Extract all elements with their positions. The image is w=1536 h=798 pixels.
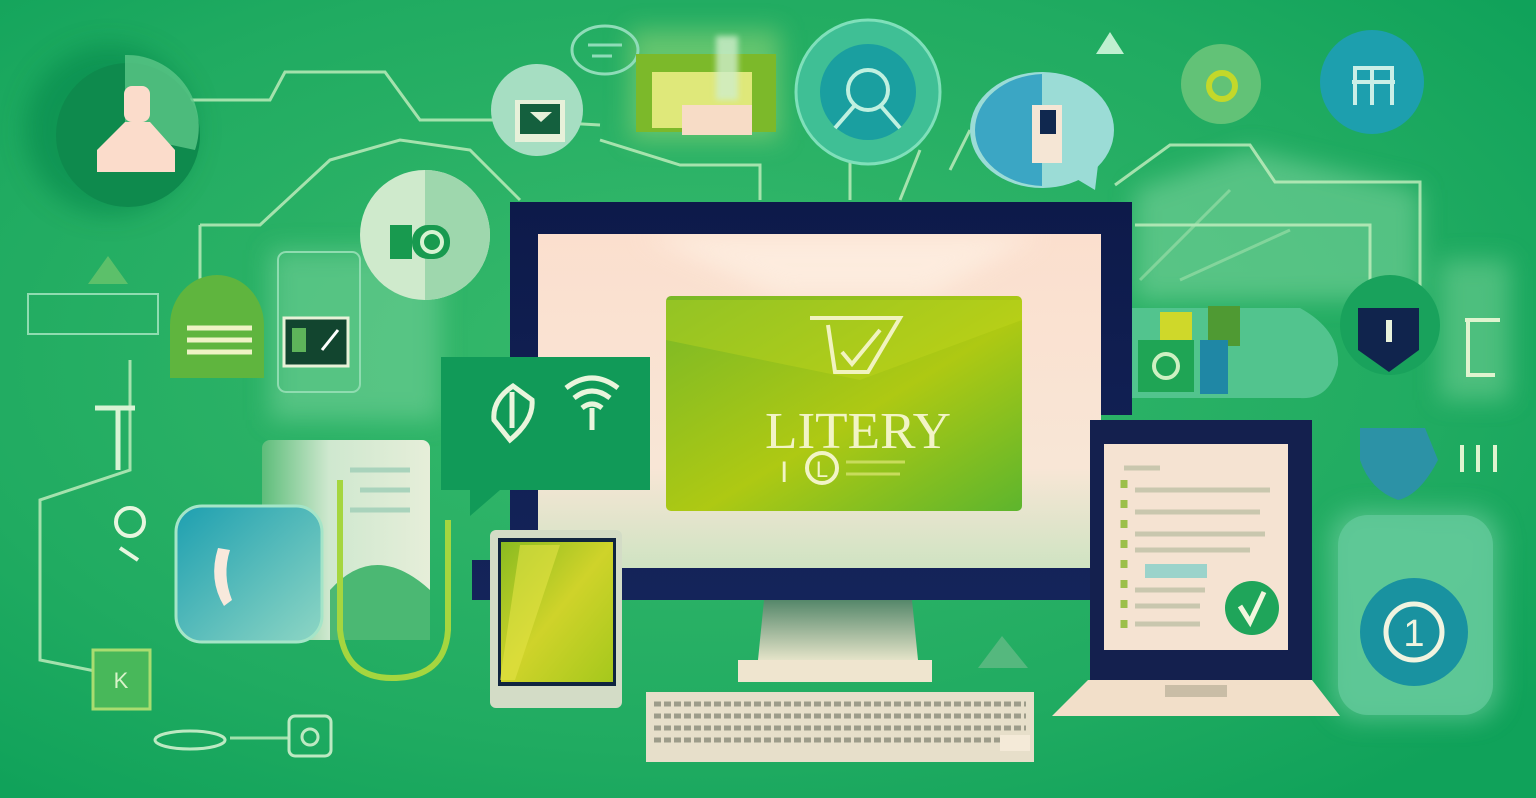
icon: magnifier circle (796, 20, 940, 164)
panel: lime title card (666, 296, 1022, 511)
laptop (1052, 420, 1340, 716)
icon: antenna (95, 408, 135, 470)
circuit lines (40, 72, 1420, 738)
monitor stand (758, 600, 918, 660)
screen light rays (680, 235, 1008, 294)
icon: teal phone tile (176, 506, 322, 642)
icon: green document circle (360, 170, 490, 300)
icon: location pin (494, 386, 532, 440)
icon: lime ring (340, 480, 448, 678)
panel: document left (262, 440, 430, 640)
keyboard (646, 692, 1034, 762)
panel: green chat card (441, 357, 650, 516)
icon: code chip (284, 318, 348, 366)
icon: person small (116, 508, 144, 560)
panel: numbered badge panel: 1 (1403, 613, 1425, 655)
panel: cloud with charts (1132, 306, 1338, 398)
icon: triangle below monitor (978, 636, 1028, 668)
icon: wifi (566, 378, 618, 430)
monitor (472, 202, 1132, 682)
laptop base (1052, 680, 1340, 716)
icon: small monitor top (491, 64, 583, 156)
icon: lime target (1181, 44, 1261, 124)
icon: square: K (114, 668, 129, 693)
icon: person badge (56, 55, 200, 207)
icon: logo check (810, 318, 900, 372)
tablet (490, 530, 622, 708)
icon: triangle left (88, 256, 128, 284)
monitor screen (538, 234, 1101, 568)
laptop screen (1104, 444, 1288, 650)
monitor bezel (472, 202, 1132, 600)
icon: chat bubble top (572, 26, 638, 74)
subheading: I (780, 456, 788, 489)
icon: navy shield (1340, 275, 1440, 375)
panel: numbered badge panel (1338, 515, 1493, 715)
icon: teal shield (1360, 428, 1438, 500)
monitor base (738, 660, 932, 682)
icon: framed picture top (636, 36, 776, 135)
icon: square (93, 650, 150, 709)
icon: teal speech bubble (970, 72, 1114, 190)
heading: LITERY (765, 403, 951, 460)
laptop lid (1090, 420, 1312, 680)
icon: teal calendar circle (1320, 30, 1424, 134)
icon: list badge (170, 275, 264, 378)
icon: link and rounded square (155, 716, 331, 756)
subheading (780, 453, 905, 489)
panel: stacked panels left (28, 252, 360, 392)
icon: check badge (1225, 581, 1279, 635)
icon: small triangle (1096, 32, 1124, 54)
icon: chart right (1462, 320, 1500, 472)
subheading: L (816, 457, 828, 482)
